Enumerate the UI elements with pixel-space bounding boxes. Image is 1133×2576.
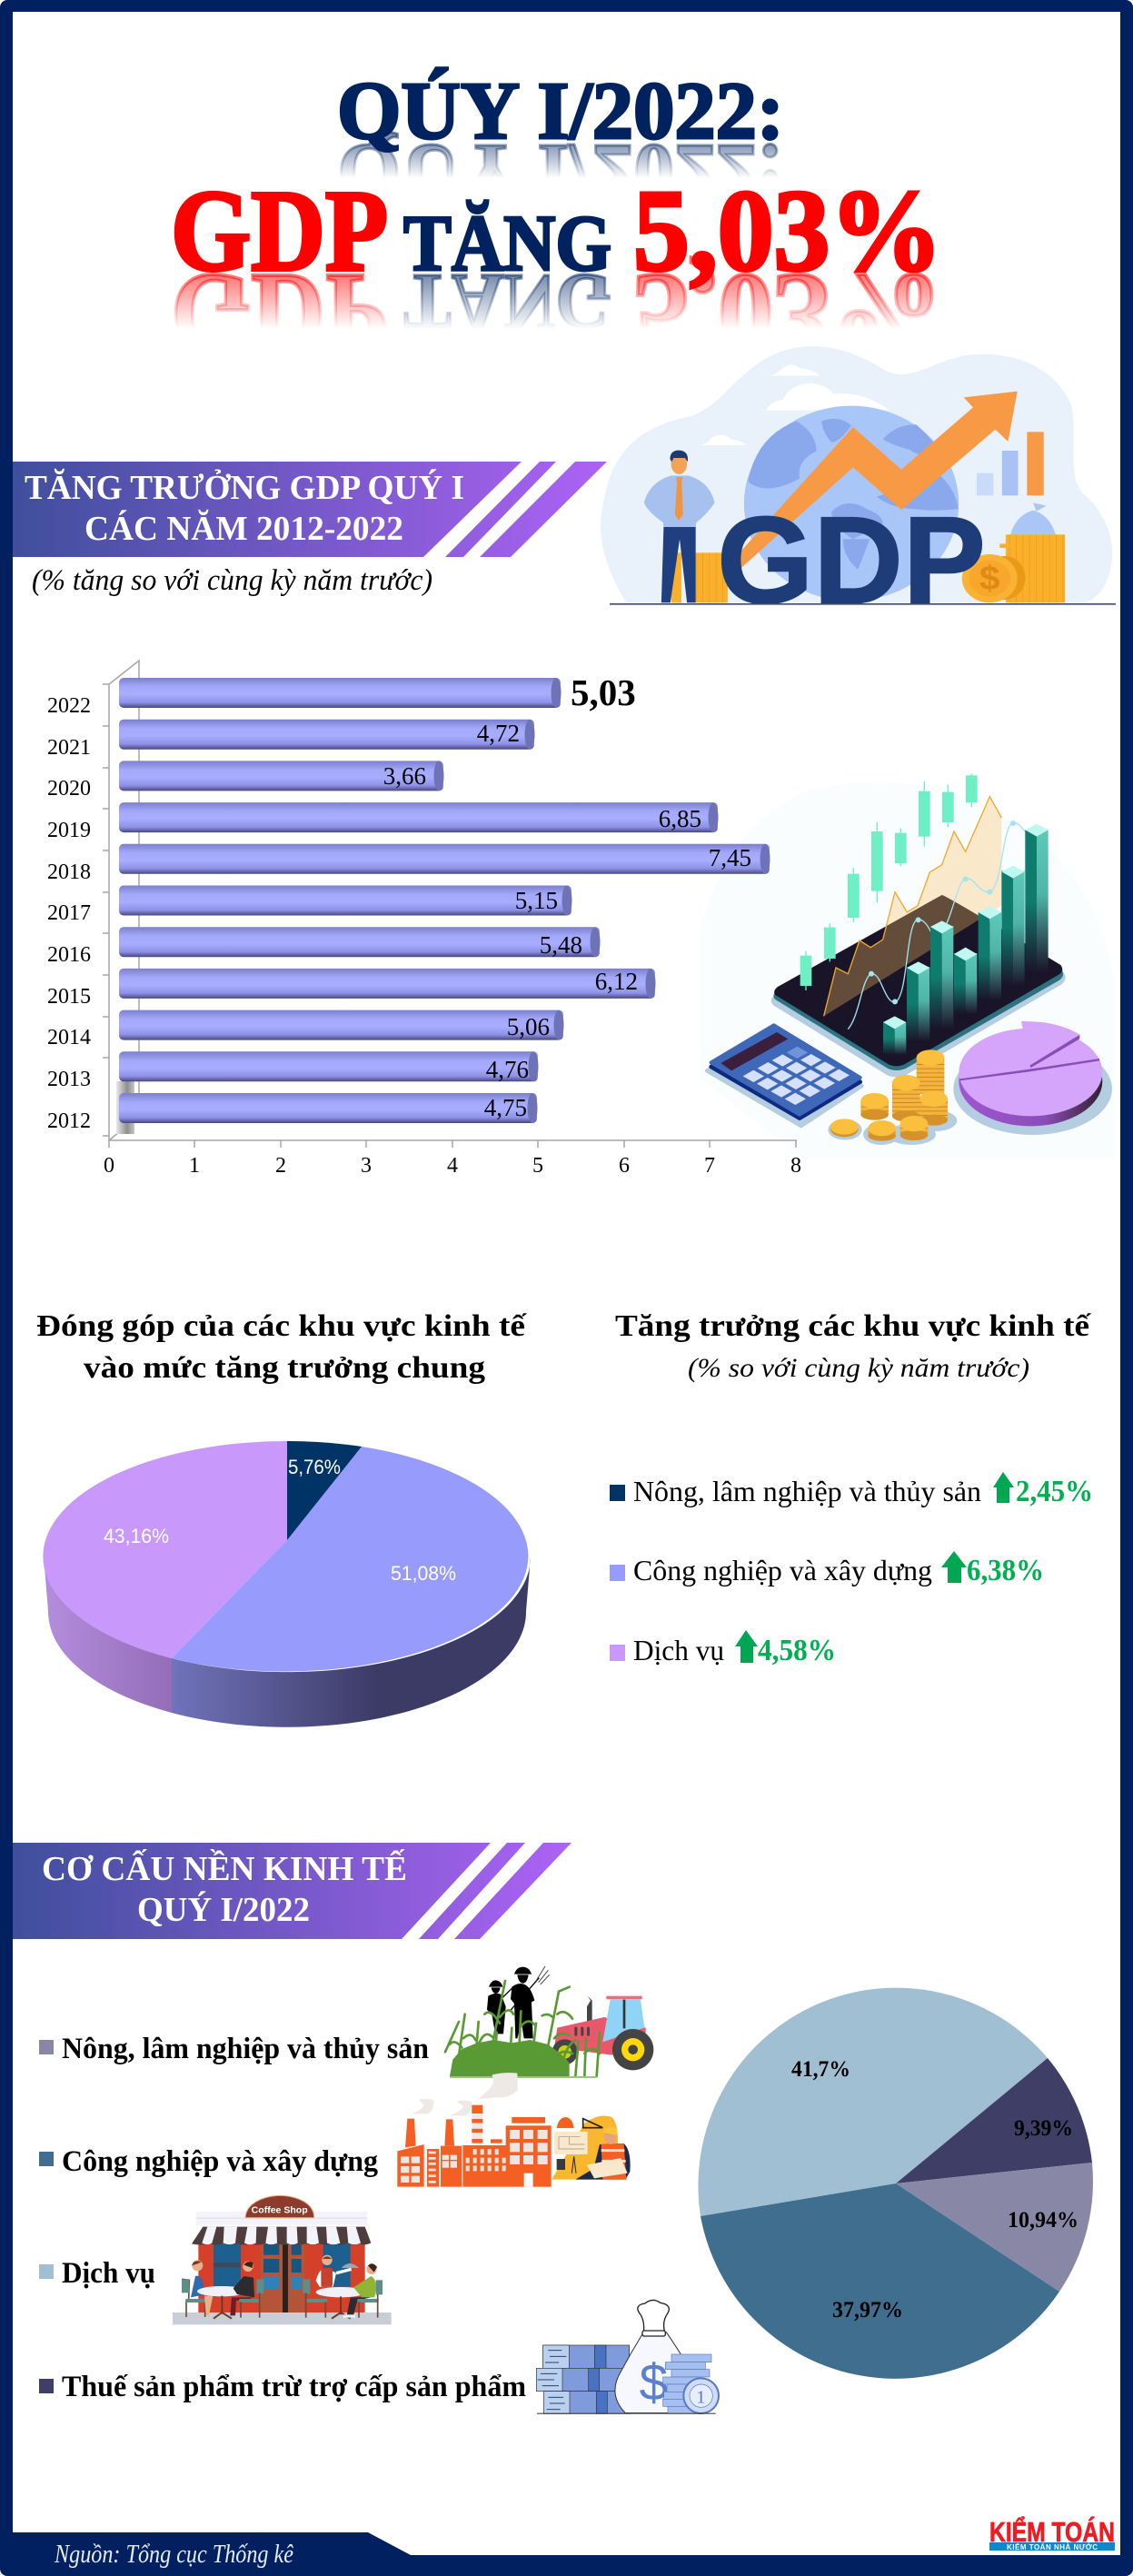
heading: sector growth: Tăng trưởng các khu vực kinh tế	[615, 1309, 1091, 1343]
heading: contribution by sector: Đóng góp của các khu vực kinh tế	[36, 1309, 527, 1343]
growth arrow	[738, 392, 1018, 571]
growth legend: industry	[610, 1551, 1044, 1587]
bar values: 6,12	[595, 968, 638, 995]
legend: services: Dịch vụ	[62, 2257, 155, 2290]
footer tab: source	[13, 2532, 411, 2569]
money bag	[615, 2300, 698, 2413]
pie chart: economic structure	[698, 1988, 1093, 2379]
x axis labels: 8	[790, 1154, 801, 1178]
bar values: 4,76	[486, 1056, 529, 1083]
awning	[192, 2227, 371, 2244]
growth legend: agriculture: 2,45%	[1016, 1475, 1093, 1508]
title 5,03%: 5,03%	[633, 166, 942, 295]
year labels	[47, 694, 91, 1133]
legend: agriculture: Nông, lâm nghiệp và thủy sản	[62, 2033, 429, 2065]
coin stack	[663, 2354, 719, 2413]
bar values: 7,45	[709, 844, 751, 871]
banner period: QUÝ I/2022	[137, 1891, 310, 1929]
engineer	[552, 2115, 631, 2180]
legend: industry: Công nghiệp và xây dựng	[62, 2145, 378, 2178]
title line 2 reflection	[171, 250, 942, 379]
heading: sector growth: (% so với cùng kỳ năm trước)	[688, 1353, 1029, 1383]
icon: money bag, cash and coins	[536, 2300, 719, 2414]
x axis labels: 4	[447, 1154, 458, 1178]
bar values: 6,85	[659, 805, 701, 832]
year labels: 2012	[47, 1109, 91, 1133]
x axis labels	[104, 1154, 801, 1178]
highlighted value 2022: 5,03	[571, 671, 636, 713]
3D pie chart: contribution	[43, 1441, 531, 1727]
year labels: 2022	[47, 694, 91, 718]
gold coins	[828, 1049, 957, 1145]
title TĂNG: TĂNG	[403, 200, 611, 288]
year labels: 2021	[47, 736, 91, 760]
3D pie chart: contribution: 51,08%	[391, 1562, 456, 1585]
x axis labels: 5	[532, 1154, 543, 1178]
calculator	[707, 1025, 861, 1126]
bars	[119, 678, 770, 1123]
3D pie chart: contribution: 43,16%	[104, 1525, 169, 1547]
tractor	[552, 1996, 653, 2070]
section banner: GDP growth	[13, 462, 607, 557]
bar values	[383, 720, 751, 1121]
title	[171, 66, 942, 379]
pie chart: economic structure: 37,97%	[832, 2298, 903, 2322]
x axis labels: 0	[104, 1154, 114, 1178]
x axis labels: 7	[704, 1154, 715, 1178]
3D bars	[883, 824, 1049, 1055]
bar values: 5,48	[540, 931, 582, 959]
bar values: 4,72	[477, 720, 520, 747]
icon: coffee shop	[173, 2195, 392, 2324]
heading: contribution by sector: vào mức tăng trưởng chung	[84, 1351, 485, 1385]
growth legend: industry: Công nghiệp và xây dựng	[633, 1554, 932, 1586]
businessman	[644, 451, 715, 602]
tablet screen	[774, 895, 1062, 1066]
bar values: 5,15	[515, 887, 558, 914]
shop sign: Coffee Shop	[252, 2205, 308, 2215]
chart axes	[103, 661, 797, 1148]
pie chart: economic structure: 9,39%	[1014, 2116, 1073, 2141]
section banner: economic structure	[13, 1843, 571, 1939]
x axis labels: 2	[275, 1154, 286, 1178]
year labels: 2017	[47, 901, 91, 925]
bar values: 5,06	[507, 1013, 550, 1040]
shop sign	[245, 2195, 314, 2218]
year labels: 2019	[47, 819, 91, 842]
icon: farm and tractor	[445, 1966, 653, 2077]
title line 1 reflection: QÚY I/2022:	[337, 127, 784, 217]
GDP letters: GDP	[717, 492, 986, 630]
heading: sector growth	[615, 1309, 1091, 1383]
title GDP: GDP	[171, 166, 388, 295]
icon: factory and engineer	[397, 2073, 631, 2187]
banner title: TĂNG TRƯỞNG GDP QUÝ I	[25, 469, 464, 507]
heading: contribution by sector	[36, 1309, 527, 1385]
purple pie	[953, 1021, 1112, 1135]
illustration: GDP growth	[601, 346, 1116, 630]
year labels: 2015	[47, 985, 91, 1009]
title line 2 reflection: 5,03%	[633, 250, 942, 379]
footer tab: source: Nguồn: Tổng cục Thống kê	[54, 2540, 293, 2569]
logo: Kiểm Toán: KIỂM TOÁN NHÀ NƯỚC	[1007, 2543, 1098, 2551]
bar values: 3,66	[383, 762, 426, 790]
growth legend: services	[610, 1630, 836, 1667]
bar values: 4,75	[484, 1094, 527, 1121]
illustration: GDP growth: $	[979, 560, 1000, 597]
money bag: $	[640, 2355, 668, 2412]
subtitle: percent change: (% tăng so với cùng kỳ năm trước)	[32, 564, 432, 597]
year labels: 2018	[47, 860, 91, 884]
growth legend: industry: 6,38%	[967, 1554, 1044, 1587]
x axis labels: 1	[189, 1154, 200, 1178]
title line 2 reflection: TĂNG	[403, 257, 611, 345]
pie chart: economic structure: 41,7%	[791, 2057, 850, 2082]
legend: taxes: Thuế sản phẩm trừ trợ cấp sản phẩm	[62, 2371, 526, 2403]
growth legend: services: 4,58%	[758, 1634, 836, 1667]
year labels: 2013	[47, 1068, 91, 1091]
bar chart: GDP growth 2012-2022	[47, 661, 801, 1178]
year labels: 2020	[47, 777, 91, 801]
3D pie chart: contribution: 5,76%	[288, 1456, 341, 1478]
corn field	[450, 2040, 570, 2076]
x axis labels: 3	[361, 1154, 372, 1178]
x axis labels: 6	[619, 1154, 630, 1178]
pie chart: economic structure: 10,94%	[1008, 2208, 1078, 2233]
title line 2 reflection: GDP	[171, 250, 388, 379]
icon: money bag, cash and coins: 1	[696, 2387, 705, 2407]
growth legend: agriculture: Nông, lâm nghiệp và thủy sản	[633, 1475, 981, 1507]
illustration: finance charts	[700, 774, 1115, 1160]
growth legend: services: Dịch vụ	[633, 1634, 724, 1666]
candlesticks	[800, 774, 978, 990]
title line 1: QÚY I/2022:	[337, 66, 784, 156]
banner years: CÁC NĂM 2012-2022	[84, 510, 403, 548]
banner title: CƠ CẤU NỀN KINH TẾ	[42, 1849, 407, 1888]
cafe customers	[182, 2255, 383, 2319]
light blue curve	[848, 821, 1027, 1029]
orange area line	[824, 797, 1001, 1016]
year labels: 2014	[47, 1026, 91, 1049]
growth legend: agriculture	[610, 1472, 1093, 1508]
year labels: 2016	[47, 943, 91, 967]
